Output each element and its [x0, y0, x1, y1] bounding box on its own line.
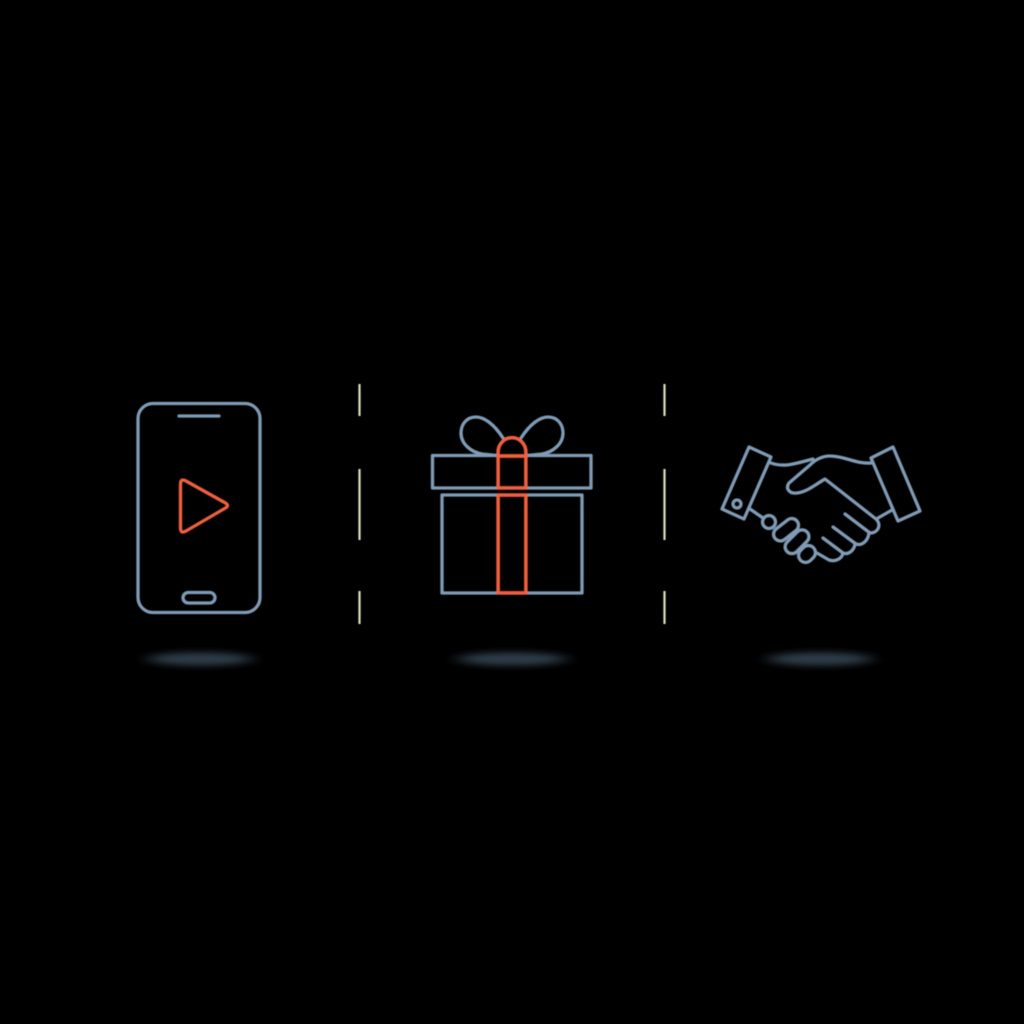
ground shadow: handshake: [768, 652, 872, 666]
divider: left dashed line: [358, 384, 361, 624]
finger lines: [833, 527, 869, 544]
play triangle: [180, 480, 228, 532]
ground shadow: gift: [458, 652, 566, 666]
phone speaker: [179, 414, 219, 418]
ground shadow: phone: [148, 652, 252, 666]
right cuff: [871, 447, 920, 521]
wrists: [878, 510, 892, 518]
bow left loop: [461, 417, 503, 456]
ribbon: [498, 438, 526, 593]
phone body: [138, 404, 260, 612]
cuff button: [733, 500, 741, 508]
upper arm line: [771, 459, 813, 465]
box body: [442, 495, 582, 593]
phone home button: [183, 592, 215, 603]
right hand and thumb: [788, 456, 879, 533]
icon: smartphone with play button: [138, 404, 260, 612]
left cuff: [722, 447, 771, 519]
icon: handshake: [722, 447, 920, 565]
divider: right dashed line: [663, 384, 666, 624]
icon: gift box: [432, 417, 591, 593]
bow right loop: [521, 417, 563, 456]
left hand fingers: [762, 516, 776, 528]
box lid: [432, 456, 591, 488]
